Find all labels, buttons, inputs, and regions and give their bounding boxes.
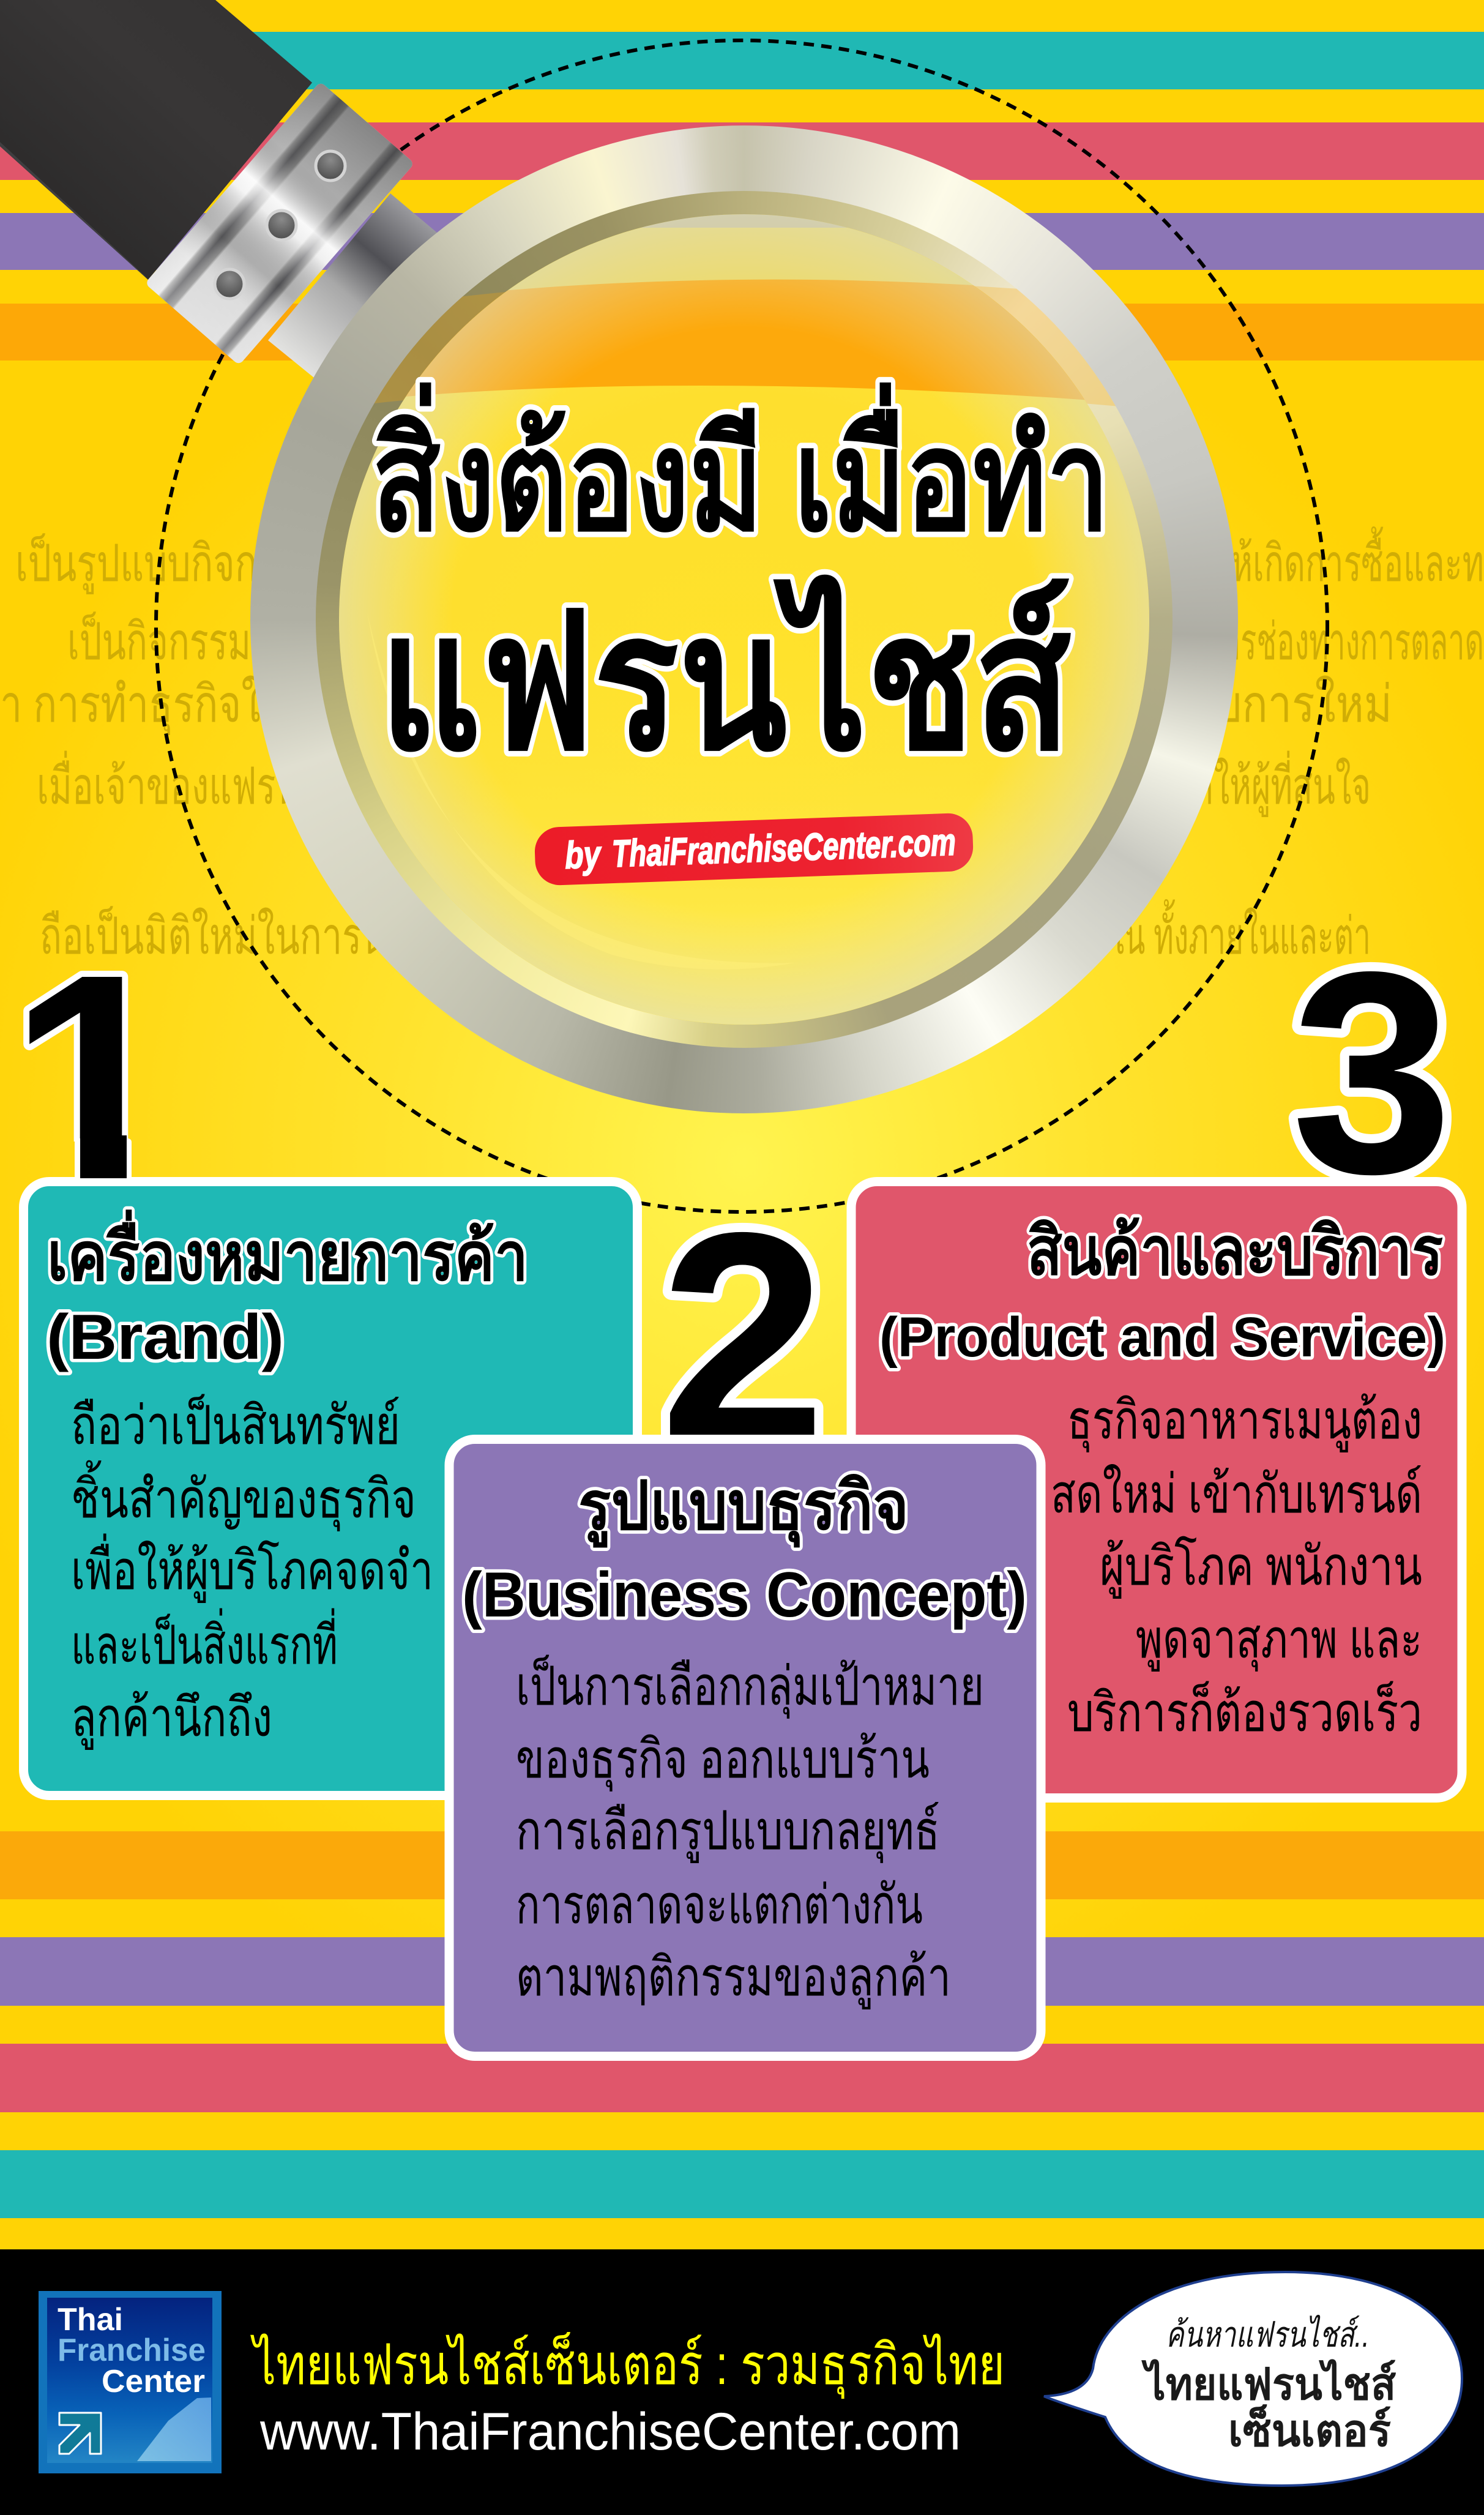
magnifier handle: [0, 0, 437, 378]
black grip: [0, 0, 312, 280]
number 2: 2: [660, 1170, 826, 1505]
logo wedge: [137, 2397, 211, 2461]
logo text: Thai: [58, 2302, 123, 2337]
faded background text: า การทำธุรกิจใน: [0, 675, 288, 736]
panel 2 body text: การตลาดจะแตกต่างกัน: [516, 1874, 923, 1935]
faded background text: เป็นรูปแบบกิจกรรม: [15, 533, 321, 594]
faded background text: เป็นกิจกรรม: [67, 611, 251, 670]
red byline pill: [534, 813, 974, 886]
speech bubble: [1044, 2272, 1462, 2486]
footer background: [0, 2249, 1484, 2515]
magnifier inner bevel ring: [316, 191, 1173, 1048]
faded background text: [0, 526, 1484, 965]
panel 2: business concept: [449, 1440, 1041, 2057]
title: [372, 382, 1109, 788]
panel 3: product and service: [851, 1181, 1462, 1798]
logo: Franchise: [58, 2333, 206, 2368]
number 1 stem overlap: [75, 1135, 132, 1186]
byline text: by: [564, 834, 603, 877]
panel 1 subheading: (Brand): [47, 1302, 284, 1373]
panel 3 subheading: (Product and Service): [879, 1306, 1445, 1369]
orange reflection through the bevel: [375, 286, 1116, 406]
faded background text: เปิดให้ผู้ที่สนใจ: [1160, 750, 1371, 817]
panel 2 body text: [516, 1654, 984, 2009]
panel 2 heading: รูปแบบธุรกิจ: [578, 1468, 909, 1548]
panel 1 body text: ลูกค้านึกถึง: [71, 1687, 272, 1750]
title line 1: สิ่งต้องมี เมื่อทำ: [372, 382, 1109, 559]
panel 2 body text: ตามพฤติกรรมของลูกค้า: [516, 1946, 951, 2009]
metal neck: [268, 193, 437, 378]
icon: logo arrow: [59, 2413, 101, 2454]
metal collar: [145, 81, 414, 365]
logo: [39, 2291, 222, 2473]
bubble name line 2: เซ็นเตอร์: [1228, 2404, 1391, 2456]
faded background text: บการใหม่: [1215, 675, 1392, 733]
magnifier lens: [330, 208, 1163, 1034]
faded background text: ถือเป็นมิติใหม่ในการนำ: [40, 906, 407, 965]
collar rivets: [215, 151, 345, 299]
number 1: 1: [9, 910, 179, 1252]
panel 1 body text: เพื่อให้ผู้บริโภคจดจำ: [71, 1533, 433, 1603]
panel 2 body text: เป็นการเลือกกลุ่มเป้าหมาย: [516, 1654, 984, 1719]
byline text: ThaiFranchiseCenter.com: [611, 821, 956, 875]
number 3: 3: [1291, 912, 1453, 1233]
footer website: www.ThaiFranchiseCenter.com: [259, 2402, 961, 2461]
panel 1 body text: ชิ้นสำคัญของธุรกิจ: [71, 1460, 416, 1531]
panel 3 body text: [1051, 1389, 1422, 1743]
title line 2: แฟรนไชส์: [379, 573, 1071, 788]
byline text: [564, 821, 956, 877]
footer Thai tagline: ไทยแฟรนไชส์เซ็นเตอร์ : รวมธุรกิจไทย: [250, 2331, 1005, 2399]
panel 1 body text: [71, 1394, 433, 1750]
panel 1 body text: และเป็นสิ่งแรกที่: [71, 1608, 338, 1675]
panel 1 heading: เครื่องหมายการค้า: [47, 1209, 528, 1295]
magnifier outer metal ring: [250, 125, 1238, 1113]
bubble small script: ค้นหาแฟรนไชส์..: [1166, 2314, 1370, 2355]
bubble name line 1: ไทยแฟรนไชส์: [1141, 2358, 1396, 2409]
dashed circle: [156, 40, 1327, 1212]
panel 2 body text: ของธุรกิจ ออกแบบร้าน: [516, 1728, 930, 1792]
faded background text: เมื่อเจ้าของแฟรน: [37, 750, 300, 815]
panel 1 body text: ถือว่าเป็นสินทรัพย์: [71, 1394, 400, 1456]
logo: Center: [102, 2364, 205, 2399]
panel 2 subheading: (Business Concept): [462, 1560, 1027, 1631]
panel 1: brand: [23, 1181, 638, 1796]
panel 2 body text: การเลือกรูปแบบกลยุทธ์: [516, 1800, 940, 1863]
